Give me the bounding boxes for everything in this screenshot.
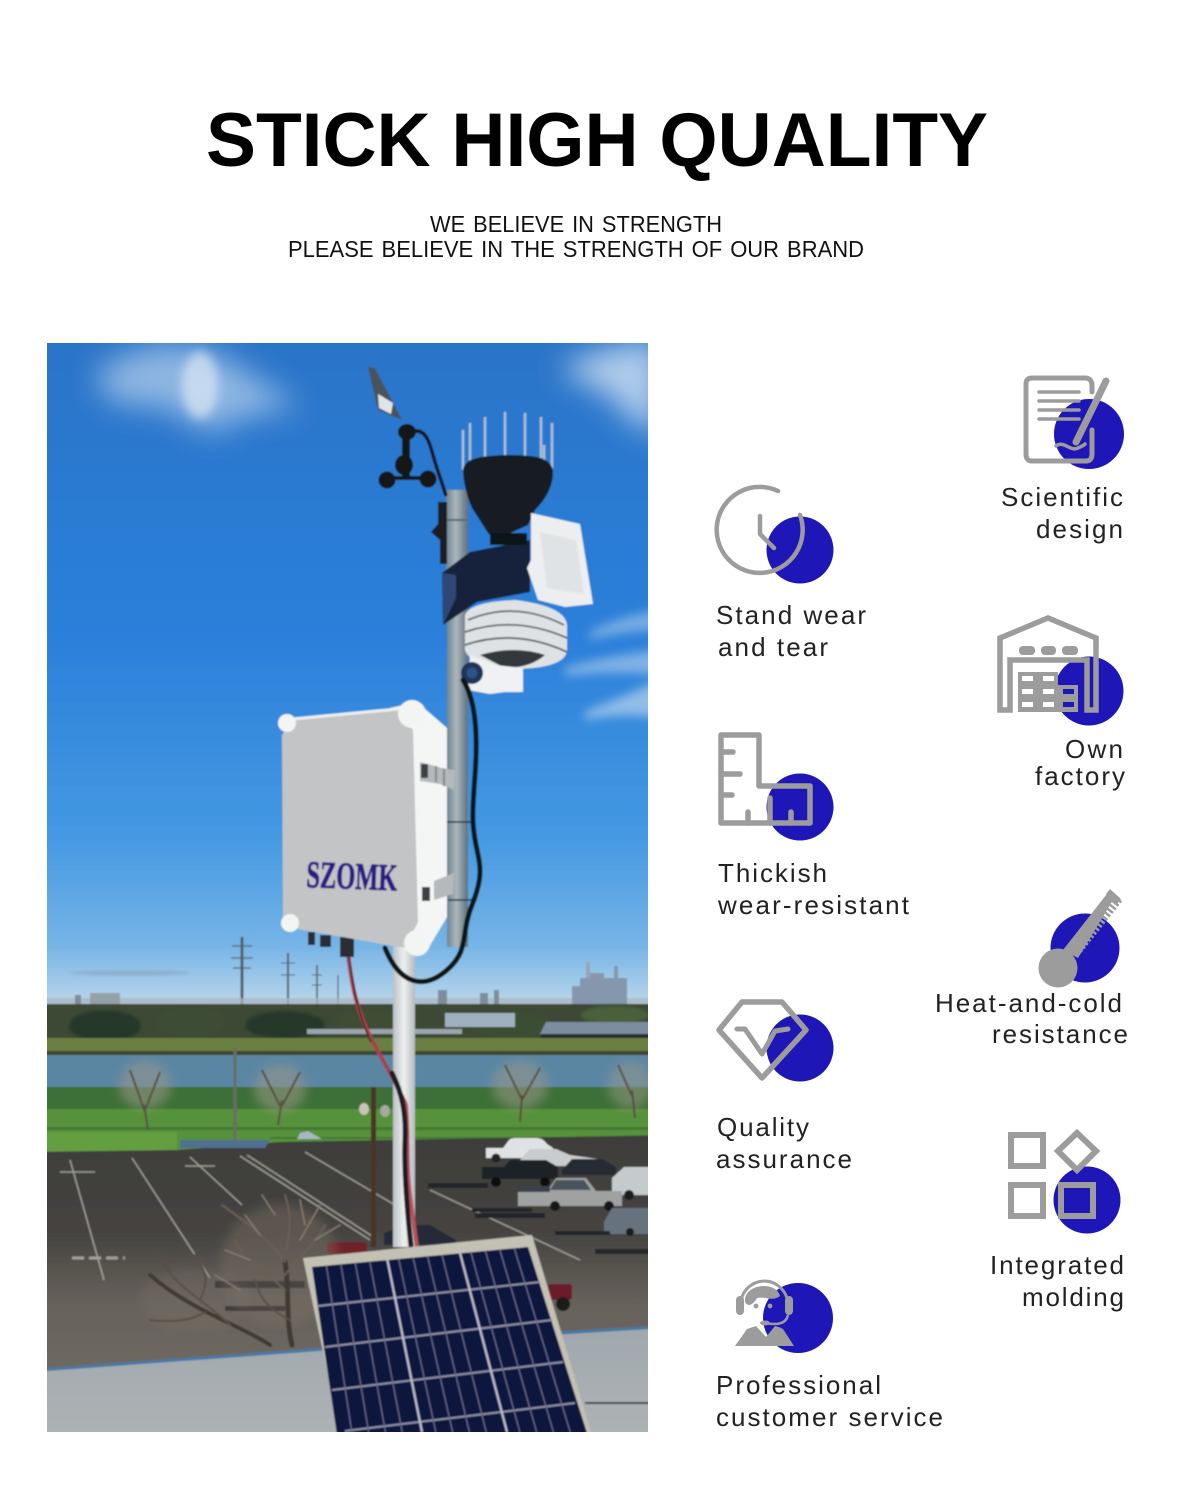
horizontal bus lines bbox=[318, 1282, 575, 1431]
parked vehicles bbox=[327, 1138, 674, 1311]
rain spikes bbox=[463, 412, 552, 470]
sensor body bbox=[442, 533, 530, 625]
skyline and plant bbox=[47, 962, 648, 1006]
parking lines bbox=[60, 1152, 580, 1280]
label: Stand wear bbox=[716, 600, 866, 630]
white camera module bbox=[461, 655, 523, 694]
white side housing bbox=[390, 702, 447, 952]
feature: thickish wear-resistant bbox=[717, 735, 910, 920]
label: Own bbox=[1065, 734, 1123, 764]
label: Professional bbox=[716, 1370, 881, 1400]
water bbox=[25, 1055, 675, 1088]
label: factory bbox=[1035, 761, 1125, 791]
label: and tear bbox=[718, 632, 828, 662]
lower white mounting pole bbox=[393, 945, 415, 1247]
black signal cable bbox=[385, 680, 480, 982]
label bbox=[716, 1112, 852, 1174]
far lamp pole and debris bbox=[180, 1048, 322, 1148]
clouds bbox=[70, 340, 660, 976]
product photo: weather station on rooftop bbox=[47, 343, 648, 1432]
far grass bank bbox=[47, 1037, 648, 1052]
bare trees on the lawn bbox=[119, 1061, 652, 1130]
levee and lawn bbox=[25, 1087, 675, 1153]
label: Integrated bbox=[990, 1250, 1124, 1280]
feature: own factory bbox=[1000, 618, 1125, 791]
label: assurance bbox=[716, 1144, 852, 1174]
cell dividers bbox=[326, 1248, 570, 1432]
label bbox=[716, 600, 866, 662]
asphalt parking lot bbox=[25, 1135, 675, 1373]
label bbox=[1035, 734, 1125, 791]
subtitle: WE BELIEVE IN STRENGTH bbox=[430, 211, 722, 237]
label: customer service bbox=[716, 1402, 943, 1432]
feature: quality assurance bbox=[716, 1002, 852, 1174]
feature: heat-and-cold resistance bbox=[935, 889, 1128, 1049]
feature: integrated molding bbox=[990, 1133, 1124, 1312]
latches bbox=[420, 762, 455, 901]
label bbox=[717, 858, 910, 920]
rear bracket on pole bbox=[431, 502, 447, 564]
wind vane and cup anemometer bbox=[368, 367, 446, 496]
solar panel bbox=[302, 1234, 592, 1432]
feature: scientific design bbox=[1001, 378, 1124, 544]
tree line bbox=[47, 1003, 648, 1039]
label: wear-resistant bbox=[717, 890, 910, 920]
ground shadows bbox=[215, 1183, 675, 1311]
icon: ruler bbox=[721, 735, 834, 840]
red and black power cable bbox=[348, 955, 417, 1246]
feature: professional customer service bbox=[716, 1281, 943, 1432]
label bbox=[716, 1370, 943, 1432]
radiation shield rings bbox=[465, 600, 567, 669]
label: molding bbox=[1022, 1282, 1124, 1312]
rooftop bbox=[47, 1325, 648, 1432]
enclosure box with SZOMK logo bbox=[278, 700, 455, 956]
foreground bare tree bbox=[140, 1195, 340, 1345]
white solar radiation panel bbox=[527, 513, 593, 607]
title: STICK HIGH QUALITY bbox=[206, 98, 988, 183]
rain collector funnel bbox=[463, 455, 553, 540]
label bbox=[990, 1250, 1124, 1312]
subtitle bbox=[288, 211, 864, 262]
distant buildings bbox=[306, 1012, 648, 1038]
icon: shape blocks bbox=[1011, 1133, 1120, 1234]
icon: document and pen bbox=[1026, 378, 1124, 469]
grey front cover bbox=[282, 710, 418, 948]
label: resistance bbox=[992, 1019, 1128, 1049]
subtitle: PLEASE BELIEVE IN THE STRENGTH OF OUR BRAND bbox=[288, 236, 864, 262]
icon: warehouse bbox=[1000, 618, 1124, 726]
label: Scientific bbox=[1001, 482, 1123, 512]
feature: stand wear and tear bbox=[716, 487, 866, 662]
cable glands under enclosure bbox=[308, 932, 354, 957]
label bbox=[1001, 482, 1123, 544]
aluminium frame bbox=[302, 1234, 592, 1432]
cells bbox=[312, 1247, 594, 1455]
brown utility pole bbox=[359, 1087, 390, 1247]
upper steel pole bbox=[445, 490, 472, 947]
label: Heat-and-cold bbox=[935, 988, 1122, 1018]
vertical bus bars bbox=[387, 1253, 507, 1432]
icon: headset agent bbox=[735, 1281, 833, 1353]
label: design bbox=[1036, 514, 1123, 544]
label bbox=[935, 988, 1128, 1049]
logo: SZOMK bbox=[306, 854, 398, 899]
icon: thermometer bbox=[1038, 889, 1121, 988]
label: Thickish bbox=[718, 858, 827, 888]
icon: diamond with check bbox=[719, 1002, 834, 1082]
label: Quality bbox=[717, 1112, 809, 1142]
icon: clock bbox=[717, 487, 834, 584]
corner caps bbox=[278, 700, 430, 956]
power pylons bbox=[230, 936, 340, 1005]
sky bbox=[47, 343, 648, 1004]
